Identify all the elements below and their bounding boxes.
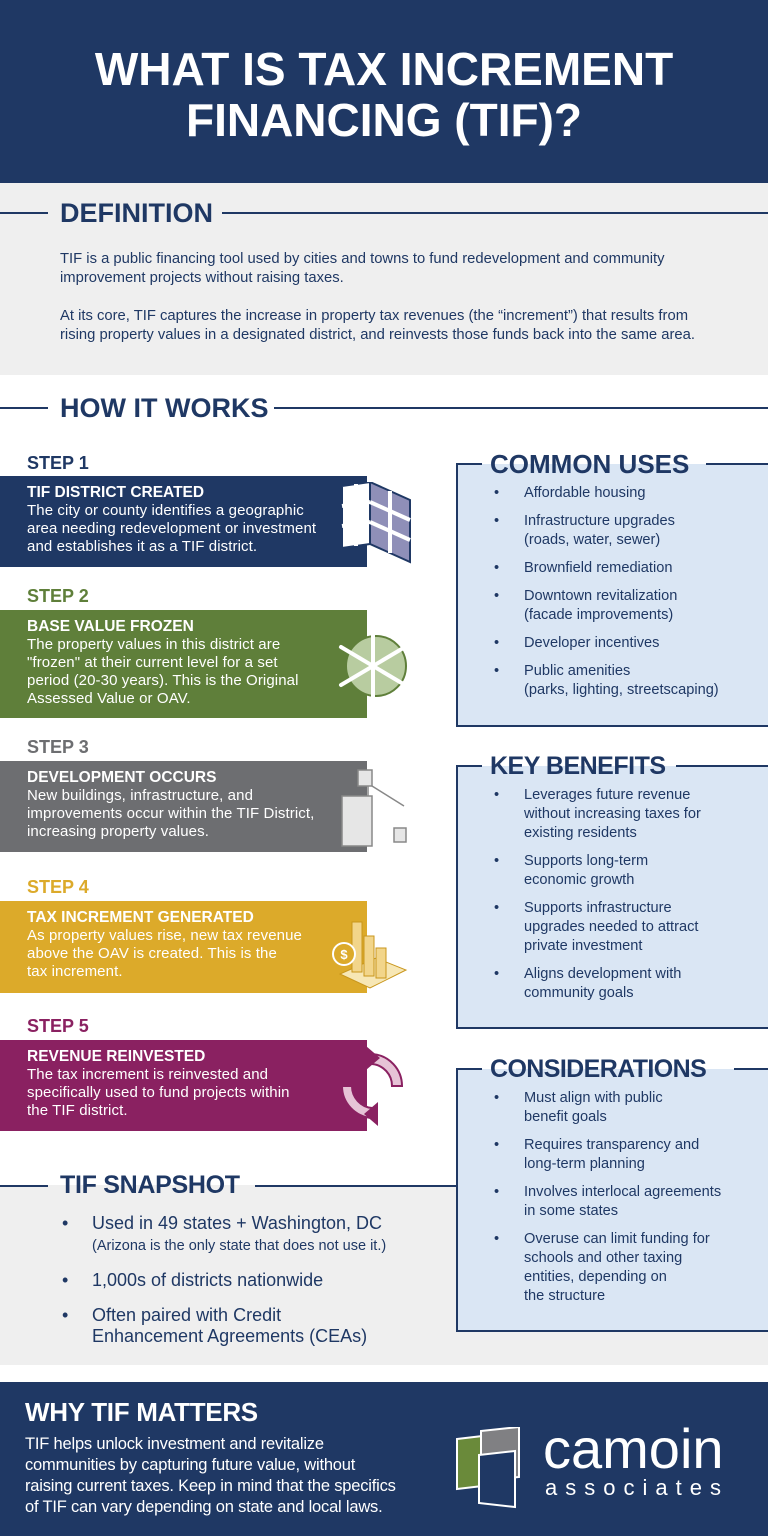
panel: common uses: Developer incentives — [524, 635, 659, 651]
panel: common uses: Brownfield remediation — [524, 560, 672, 576]
panel: common uses: Affordable housing — [524, 485, 645, 501]
step 5 box: The tax increment is reinvested and — [27, 1066, 268, 1083]
footer text: communities by capturing future value, without — [25, 1456, 355, 1474]
snapshot list: Enhancement Agreements (CEAs) — [92, 1326, 367, 1346]
panel: considerations: benefit goals — [524, 1109, 607, 1125]
step 4 label: STEP 4 — [27, 877, 89, 897]
step 1 box — [0, 476, 367, 567]
step 2 box: period (20-30 years). This is the Original — [27, 672, 299, 689]
heading: common uses: COMMON USES — [490, 449, 689, 479]
footer text: of TIF can vary depending on state and local laws. — [25, 1498, 382, 1516]
step 2 box: Assessed Value or OAV. — [27, 690, 191, 707]
footer text — [25, 1435, 396, 1516]
definition text: rising property values in a designated district, and reinvests those funds back into the same area. — [60, 327, 695, 343]
panel: considerations — [456, 1069, 768, 1332]
step 1 box: and establishes it as a TIF district. — [27, 538, 257, 555]
step 5 box: the TIF district. — [27, 1102, 128, 1119]
snapshot list: • — [62, 1305, 68, 1325]
footer text: raising current taxes. Keep in mind that the specifics — [25, 1477, 396, 1495]
step 2 box: The property values in this district are — [27, 636, 280, 653]
step 2 box: "frozen" at their current level for a set — [27, 654, 278, 671]
heading: definition: DEFINITION — [60, 198, 213, 228]
step 3 box: improvements occur within the TIF District, — [27, 805, 314, 822]
panel: common uses — [456, 464, 768, 727]
step 1 box: area needing redevelopment or investment — [27, 520, 316, 537]
panel: considerations: Must align with public — [524, 1090, 663, 1106]
panel: key benefits: existing residents — [524, 825, 637, 841]
snapshot list — [62, 1213, 386, 1346]
definition text: improvement projects without raising taxes. — [60, 270, 344, 286]
panel: considerations: entities, depending on — [524, 1269, 667, 1285]
heading: tif snapshot: TIF SNAPSHOT — [60, 1171, 240, 1199]
panel: considerations: Requires transparency and — [524, 1137, 699, 1153]
heading: key benefits: KEY BENEFITS — [490, 752, 666, 780]
panel: common uses: Infrastructure upgrades — [524, 513, 675, 529]
title: WHAT IS TAX INCREMENT — [95, 43, 673, 95]
snapshot list: Often paired with Credit — [92, 1305, 281, 1325]
panel: considerations: the structure — [524, 1288, 605, 1304]
panel: considerations: in some states — [524, 1203, 618, 1219]
step 4 box — [0, 901, 367, 993]
footer: why tif matters — [0, 1382, 768, 1536]
icon: rising bars: $ — [340, 947, 348, 962]
step 1 box: TIF DISTRICT CREATED — [27, 484, 204, 501]
title: FINANCING (TIF)? — [186, 94, 582, 146]
step 3 box: DEVELOPMENT OCCURS — [27, 769, 216, 786]
snapshot list: • — [62, 1213, 68, 1233]
step 4 box: As property values rise, new tax revenue — [27, 927, 302, 944]
icon: rising bars — [332, 922, 408, 988]
panel: common uses: Public amenities — [524, 663, 630, 679]
heading: why tif matters: WHY TIF MATTERS — [25, 1397, 258, 1427]
step 4 box: tax increment. — [27, 963, 123, 980]
step 5 box — [0, 1040, 367, 1131]
step 2 box: BASE VALUE FROZEN — [27, 618, 194, 635]
panel: common uses: (parks, lighting, streetscaping) — [524, 682, 719, 698]
snapshot list: Used in 49 states + Washington, DC — [92, 1213, 382, 1233]
panel: key benefits: Supports long-term — [524, 853, 648, 869]
snapshot list: (Arizona is the only state that does not use it.) — [92, 1238, 386, 1254]
step 3 box: New buildings, infrastructure, and — [27, 787, 253, 804]
icon: construction — [341, 769, 407, 847]
panel: considerations: Involves interlocal agreements — [524, 1184, 721, 1200]
heading: considerations: CONSIDERATIONS — [490, 1055, 706, 1083]
panel: key benefits — [456, 766, 768, 1029]
step 5 box: specifically used to fund projects within — [27, 1084, 290, 1101]
definition text: TIF is a public financing tool used by cities and towns to fund redevelopment and community — [60, 251, 665, 267]
step 1 label: STEP 1 — [27, 453, 89, 473]
step 5 label: STEP 5 — [27, 1016, 89, 1036]
icon: snowflake — [338, 635, 407, 697]
panel: common uses: (facade improvements) — [524, 607, 673, 623]
panel: snapshot — [0, 1185, 768, 1365]
panel: considerations: schools and other taxing — [524, 1250, 682, 1266]
step 5 box: REVENUE REINVESTED — [27, 1048, 205, 1065]
header banner — [0, 0, 768, 183]
title — [94, 43, 673, 146]
icon: recycle arrows — [343, 1046, 403, 1126]
logo: camoin associates: associates — [545, 1475, 729, 1500]
icon: district map — [342, 482, 411, 564]
logo: camoin associates — [456, 1417, 729, 1508]
definition text: At its core, TIF captures the increase in property tax revenues (the “increment”) that results from — [60, 308, 688, 324]
step 4 box: above the OAV is created. This is the — [27, 945, 277, 962]
panel: considerations: long-term planning — [524, 1156, 645, 1172]
panel: key benefits: upgrades needed to attract — [524, 919, 698, 935]
step 2 box — [0, 610, 367, 718]
step 3 box: increasing property values. — [27, 823, 209, 840]
panel: considerations: Overuse can limit funding for — [524, 1231, 710, 1247]
panel: definition — [0, 183, 768, 375]
logo: camoin associates: camoin — [543, 1417, 724, 1480]
step 3 box — [0, 761, 367, 852]
panel: key benefits: community goals — [524, 985, 634, 1001]
step 1 box: The city or county identifies a geographic — [27, 502, 304, 519]
step 2 label: STEP 2 — [27, 586, 89, 606]
panel: key benefits: private investment — [524, 938, 642, 954]
panel: key benefits: without increasing taxes for — [524, 806, 701, 822]
panel: key benefits: Aligns development with — [524, 966, 681, 982]
panel: common uses: Downtown revitalization — [524, 588, 677, 604]
panel: key benefits: Supports infrastructure — [524, 900, 672, 916]
panel: key benefits: Leverages future revenue — [524, 787, 690, 803]
snapshot list: 1,000s of districts nationwide — [92, 1270, 323, 1290]
snapshot list: • — [62, 1270, 68, 1290]
step 4 box: TAX INCREMENT GENERATED — [27, 909, 254, 926]
footer text: TIF helps unlock investment and revitalize — [25, 1435, 324, 1453]
definition text — [60, 251, 695, 343]
step 3 label: STEP 3 — [27, 737, 89, 757]
panel: key benefits: economic growth — [524, 872, 634, 888]
heading: how it works: HOW IT WORKS — [60, 393, 268, 423]
panel: common uses: (roads, water, sewer) — [524, 532, 660, 548]
